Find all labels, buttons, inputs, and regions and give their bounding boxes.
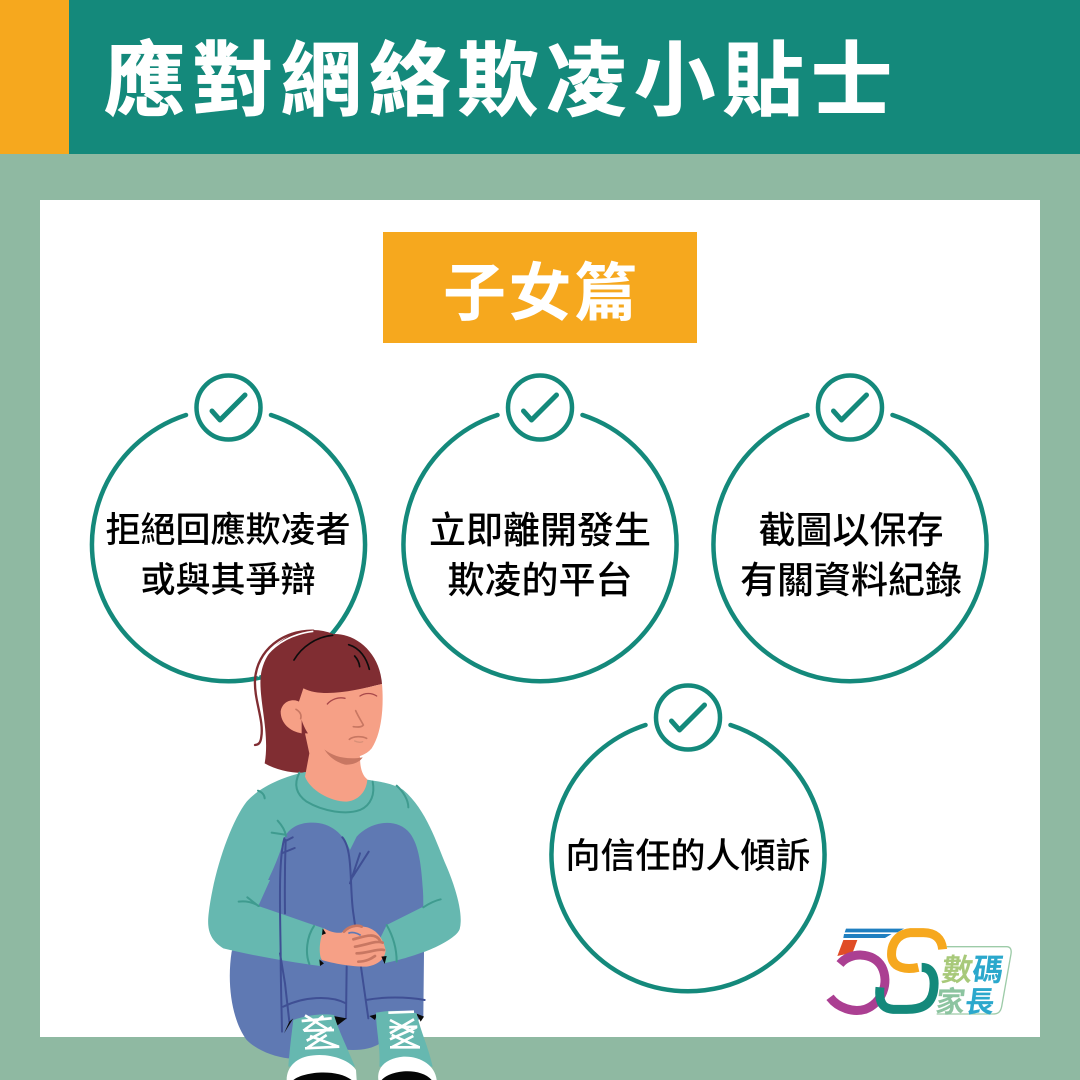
neck and face [305, 733, 367, 802]
logo yellow curve [892, 933, 943, 968]
tip circle 3 [714, 376, 987, 681]
logo teal curve [880, 967, 934, 1009]
panel: white content area [40, 200, 1040, 1037]
icon: check 2 [508, 376, 572, 440]
shoe shadows [284, 1013, 424, 1033]
sweater folds [239, 786, 441, 964]
tip text 1: 或與其爭辯 [140, 561, 316, 600]
sweater torso [208, 772, 461, 967]
logo blue stripes [843, 929, 904, 938]
tip text 1: 拒絕回應欺凌者 [105, 511, 351, 550]
right arm sleeve over jeans [379, 853, 460, 963]
icon: check 1 [196, 376, 260, 440]
jeans [230, 823, 424, 1058]
icon: check 3 [818, 376, 882, 440]
ear [281, 700, 302, 733]
subtitle badge [383, 232, 697, 343]
left arm sleeve over jeans [209, 880, 324, 966]
hair back strand [255, 631, 313, 745]
logo text: 數碼 [940, 953, 1005, 988]
title: 應對網絡欺凌小貼士 [104, 37, 892, 127]
subtitle badge: 子女篇 [443, 259, 637, 329]
logo text [934, 953, 1005, 1019]
tip text 2: 欺凌的平台 [448, 560, 632, 601]
header band [0, 0, 1080, 154]
logo: 55 數碼家長 [830, 929, 1011, 1019]
icon: check 4 [656, 686, 720, 750]
face details [327, 693, 377, 704]
logo text: 家長 [934, 986, 997, 1019]
hair [260, 630, 382, 773]
hands [320, 926, 386, 967]
jeans seams [280, 837, 425, 1032]
logo red wedge [837, 940, 857, 956]
tip text 4: 向信任的人傾訴 [565, 837, 811, 876]
tip circle 1 [92, 376, 365, 681]
cuffs black [319, 928, 387, 966]
right shoe [376, 1011, 437, 1080]
hair highlights [294, 635, 369, 669]
illustration: seated girl hugging knees [208, 630, 461, 1080]
tip text 2: 立即離開發生 [429, 510, 651, 551]
logo five [830, 955, 885, 1010]
left shoe [287, 1014, 357, 1080]
tip circle 2 [404, 376, 676, 681]
chin shadow [324, 749, 363, 765]
logo frame [937, 947, 1011, 1014]
tip circle 4 [551, 686, 824, 991]
tip text 3: 有關資料紀錄 [740, 560, 962, 601]
collar [296, 773, 373, 812]
tip text 3: 截圖以保存 [758, 510, 944, 551]
